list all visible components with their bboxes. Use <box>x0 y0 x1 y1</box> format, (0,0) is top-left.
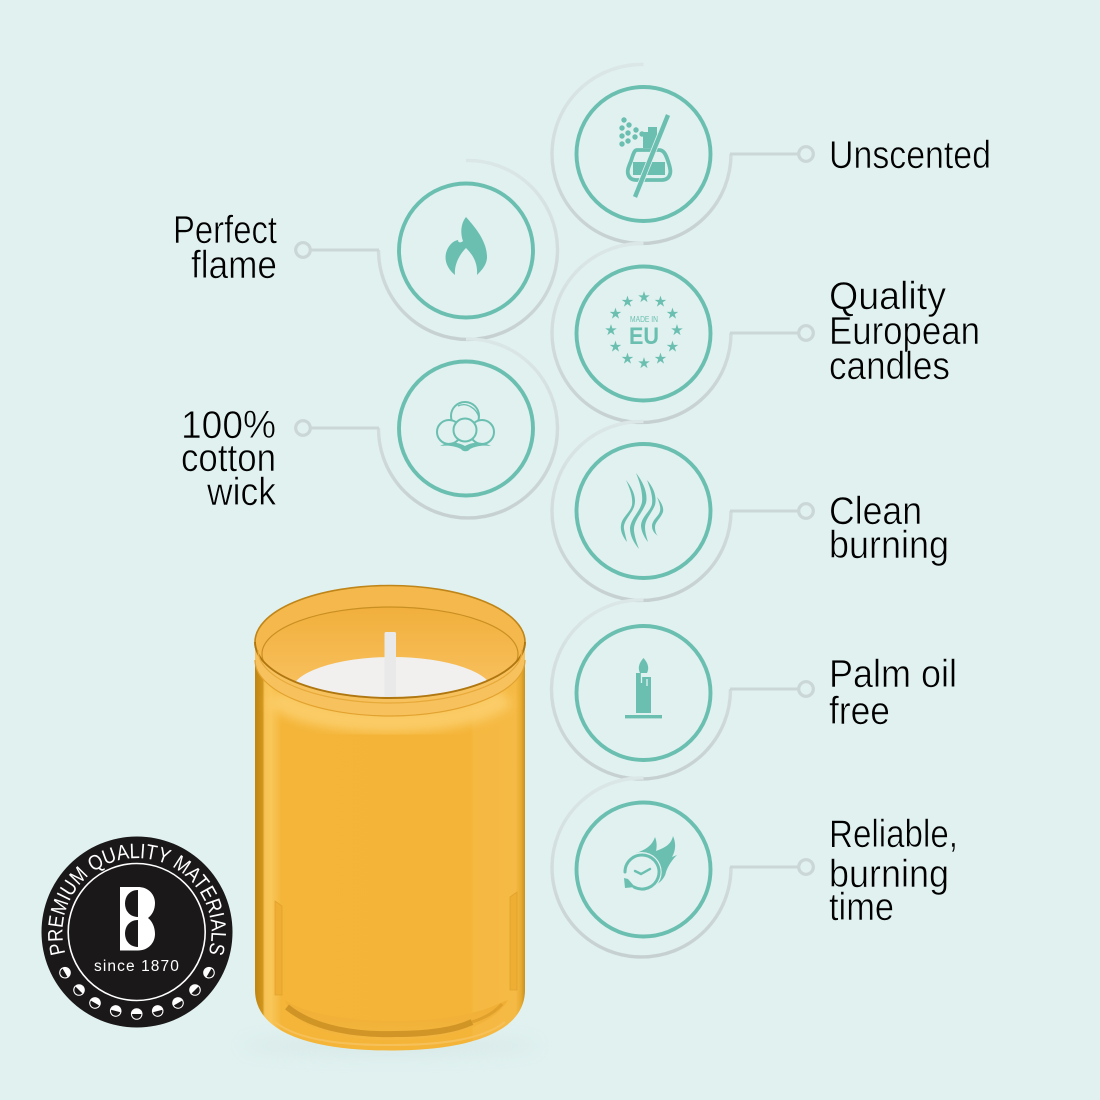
wax surface <box>291 657 493 727</box>
panel: perfect flame feature <box>173 160 558 339</box>
label: Quality European candles: candles <box>829 345 950 388</box>
icon: made in EU stars: ★ <box>609 304 622 322</box>
panel: cotton wick feature <box>181 339 557 518</box>
label: Reliable, burning time: time <box>829 886 894 929</box>
left mold notch <box>275 901 282 995</box>
icon: made in EU stars: MADE IN <box>630 315 658 324</box>
label: Reliable, burning time: burning <box>829 853 949 896</box>
icon: smoke waves <box>621 473 663 549</box>
rim bands <box>255 642 525 716</box>
connector line: palm oil free <box>730 688 798 690</box>
base bands <box>285 1000 508 1040</box>
label: Reliable, burning time: Reliable, <box>829 813 958 856</box>
connector line: cotton wick <box>311 426 379 430</box>
label: Palm oil free <box>829 653 957 733</box>
ring: European <box>576 266 710 400</box>
connector line: unscented <box>730 152 798 156</box>
panel: palm oil free feature <box>552 600 957 779</box>
connector arc: burning time <box>552 778 731 957</box>
label: Clean burning: Clean <box>829 490 922 533</box>
label: Palm oil free: free <box>829 690 890 733</box>
ring: clean burning <box>576 444 710 578</box>
connector arc: perfect flame <box>378 160 558 339</box>
icon: made in EU stars <box>604 288 684 372</box>
label: Quality European candles: European <box>829 310 980 353</box>
label: Clean burning <box>829 490 949 567</box>
panel: reliable burning time feature <box>552 778 958 957</box>
connector arc: clean burning <box>552 421 731 600</box>
connector dot: unscented <box>799 147 813 161</box>
badge arc text: PREMIUM QUALITY MATERIALS <box>48 844 226 956</box>
label: Clean burning: burning <box>829 524 949 567</box>
label: Perfect flame <box>173 209 277 287</box>
label: Perfect flame: Perfect <box>173 209 277 252</box>
label: Reliable, burning time <box>829 813 958 929</box>
icon: made in EU stars: ★ <box>604 321 618 339</box>
icon: flame <box>446 217 487 275</box>
icon: made in EU stars: ★ <box>666 338 679 356</box>
connector dot: palm oil free <box>799 682 813 696</box>
connector arc: palm oil free <box>552 600 731 779</box>
icon: made in EU stars: ★ <box>609 338 622 356</box>
connector arc: unscented <box>552 64 731 243</box>
glass interior <box>262 607 518 701</box>
badge dots <box>57 965 217 1020</box>
label: 100% cotton wick: 100% <box>181 404 276 447</box>
label: 100% cotton wick <box>181 404 276 514</box>
wick <box>384 632 396 698</box>
since 1870: since 1870 <box>94 958 180 975</box>
icon: cotton boll <box>437 402 494 451</box>
icon: clock with flames <box>622 836 677 892</box>
label: Palm oil free: Palm oil <box>829 653 957 696</box>
connector dot: cotton wick <box>296 421 310 435</box>
connector line: clean burning <box>730 510 798 512</box>
ring: palm oil free <box>576 626 710 760</box>
label: 100% cotton wick: wick <box>206 471 276 514</box>
connector dot: clean burning <box>799 504 813 518</box>
ring: perfect flame <box>399 184 533 318</box>
icon: made in EU stars: ★ <box>654 292 667 310</box>
badge: premium quality materials <box>42 836 232 1028</box>
connector dot: perfect flame <box>296 243 310 257</box>
connector arc: cotton wick <box>378 339 557 518</box>
ring: cotton wick <box>399 362 533 496</box>
candle in amber glass <box>240 586 540 1055</box>
connector dot: European <box>799 326 813 340</box>
ring: unscented <box>576 87 710 221</box>
icon: made in EU stars: ★ <box>637 288 651 306</box>
panel: European candles feature <box>552 243 980 422</box>
icon: made in EU stars: ★ <box>654 350 667 368</box>
icon: made in EU stars: ★ <box>637 354 651 372</box>
panel: unscented feature <box>552 64 991 243</box>
brand B logo <box>120 887 155 950</box>
icon: made in EU stars: ★ <box>621 350 634 368</box>
panel: clean burning feature <box>552 421 949 600</box>
icon: made in EU stars: EU <box>629 323 659 350</box>
right mold notch <box>510 892 517 990</box>
label: Quality European candles: Quality <box>829 275 946 318</box>
label: 100% cotton wick: cotton <box>181 437 276 480</box>
connector line: perfect flame <box>311 248 379 252</box>
ring: burning time <box>576 802 710 936</box>
icon: made in EU stars: ★ <box>621 292 634 310</box>
label: Quality European candles <box>829 275 980 388</box>
glass body <box>255 642 525 1050</box>
top glow <box>275 696 505 722</box>
icon: candle <box>625 658 662 718</box>
connector dot: burning time <box>799 860 813 874</box>
icon: made in EU stars: ★ <box>666 304 679 322</box>
icon: crossed-out perfume bottle <box>619 115 670 197</box>
icon: made in EU stars: ★ <box>670 321 684 339</box>
label: Perfect flame: flame <box>191 244 277 287</box>
label: Unscented: Unscented <box>829 134 991 177</box>
connector arc: European <box>552 243 731 422</box>
connector line: burning time <box>730 866 798 868</box>
connector line: European <box>730 332 798 334</box>
glass back rim <box>255 586 525 698</box>
